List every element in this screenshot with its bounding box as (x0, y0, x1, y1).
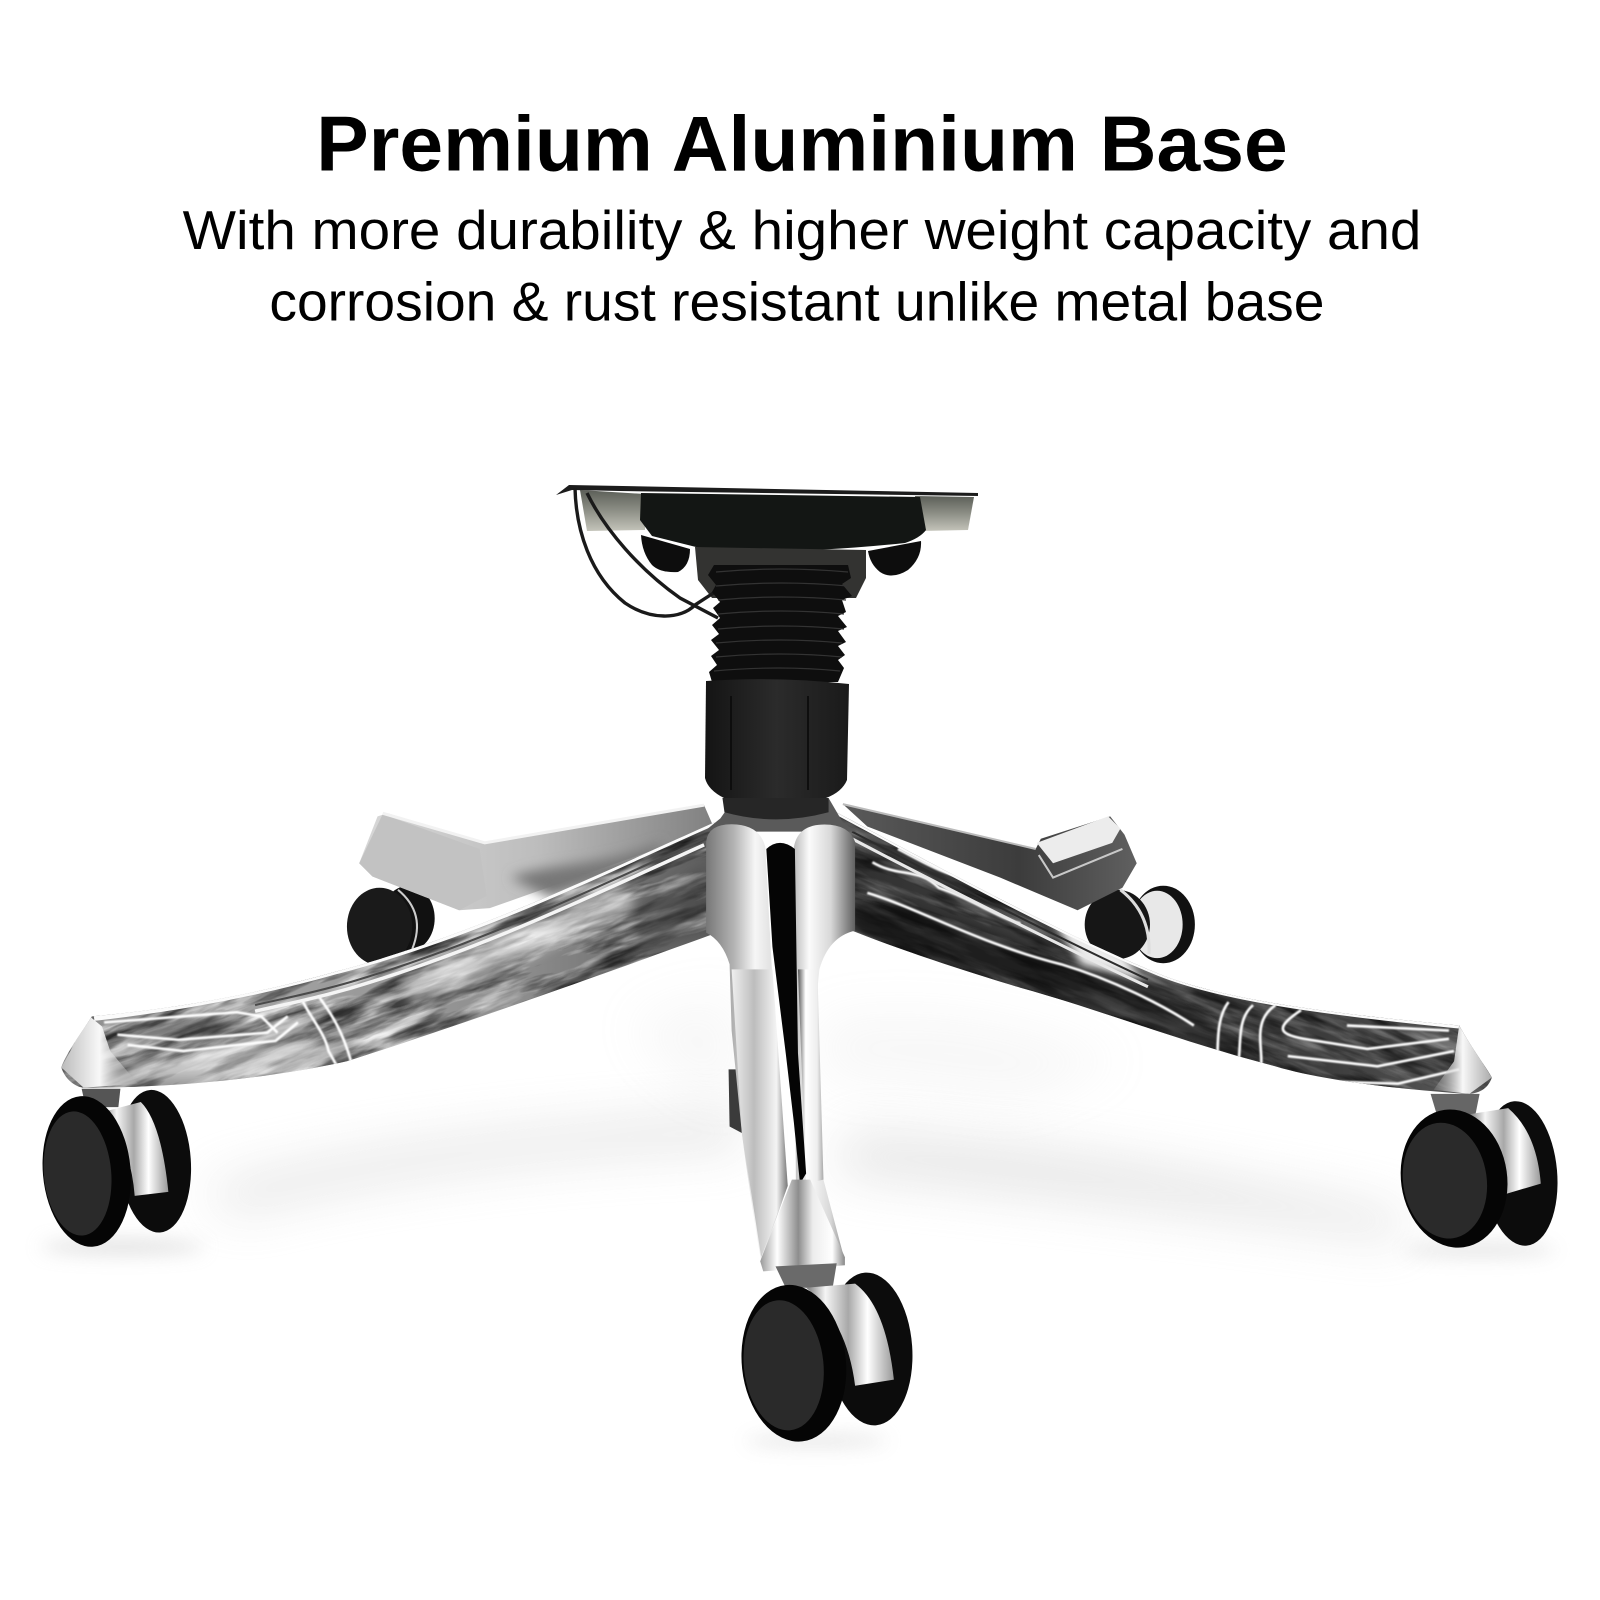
thread highlights (714, 569, 848, 671)
left front caster (36, 1087, 196, 1250)
mechanism housing (640, 493, 926, 551)
seat plate side panels (580, 490, 974, 531)
back left arm (359, 805, 714, 910)
right arm reflections (867, 849, 1459, 1084)
centre caster stem (776, 1263, 837, 1288)
centre front wheel (734, 1280, 854, 1447)
left arm metal texture (65, 828, 708, 1088)
five-star aluminium base (42, 798, 1558, 1442)
right arm metal texture (840, 816, 1477, 1094)
column collar (705, 679, 849, 798)
title: Premium Aluminium Base (316, 101, 1288, 187)
right rear wheel (1477, 1098, 1563, 1249)
right chrome hood (1469, 1108, 1541, 1194)
left chrome hood (102, 1102, 168, 1196)
right wheel hub (1395, 1117, 1494, 1244)
left rear wheel (114, 1087, 196, 1235)
left side of leg (706, 824, 788, 1261)
heading block (183, 101, 1421, 332)
threaded column (708, 565, 852, 682)
tip highlight (1434, 1026, 1492, 1094)
left front wheel (36, 1092, 137, 1250)
left caster stem (82, 1089, 120, 1107)
rear centre leg stub (729, 1069, 745, 1135)
right caster stem (1431, 1094, 1480, 1114)
front right arm (837, 812, 1492, 1094)
right lower leg shading (798, 969, 823, 1184)
metal bracket (695, 547, 866, 598)
centre wheel hub (737, 1296, 830, 1434)
adjustment knobs (641, 535, 921, 576)
centre chrome hood (806, 1284, 894, 1386)
left arm contour lines (104, 996, 351, 1069)
centre leg (706, 824, 855, 1271)
floor shadows (41, 995, 1556, 1447)
left wheel hub (39, 1109, 117, 1238)
right front wheel (1392, 1102, 1516, 1255)
centre front caster (734, 1263, 917, 1447)
centre hub (704, 798, 857, 832)
left arm reflections (112, 888, 638, 1078)
upper chamfer (94, 820, 714, 1016)
left lower leg shading (732, 969, 788, 1257)
right arm dark lower band (852, 898, 1276, 1066)
right front caster (1392, 1094, 1563, 1255)
foot cone (760, 1180, 845, 1271)
tip highlight (61, 1016, 138, 1088)
subtitle line 2: corrosion & rust resistant unlike metal base (269, 270, 1324, 332)
seat plate top edge (556, 485, 978, 496)
upper chamfer (829, 806, 1459, 1024)
gas lift and seat mechanism (556, 485, 978, 798)
centre rear wheel (823, 1270, 917, 1428)
collar bottom ring (722, 798, 829, 819)
right side of leg (794, 824, 855, 1257)
collar seams (731, 696, 808, 790)
back right wheel (1085, 886, 1195, 963)
back left wheel (347, 886, 435, 965)
subtitle line 1: With more durability & higher weight capacity and (183, 199, 1421, 261)
back right arm (843, 804, 1137, 910)
control cables (575, 488, 718, 618)
centre black strip (766, 843, 806, 1184)
front left arm (61, 822, 714, 1088)
